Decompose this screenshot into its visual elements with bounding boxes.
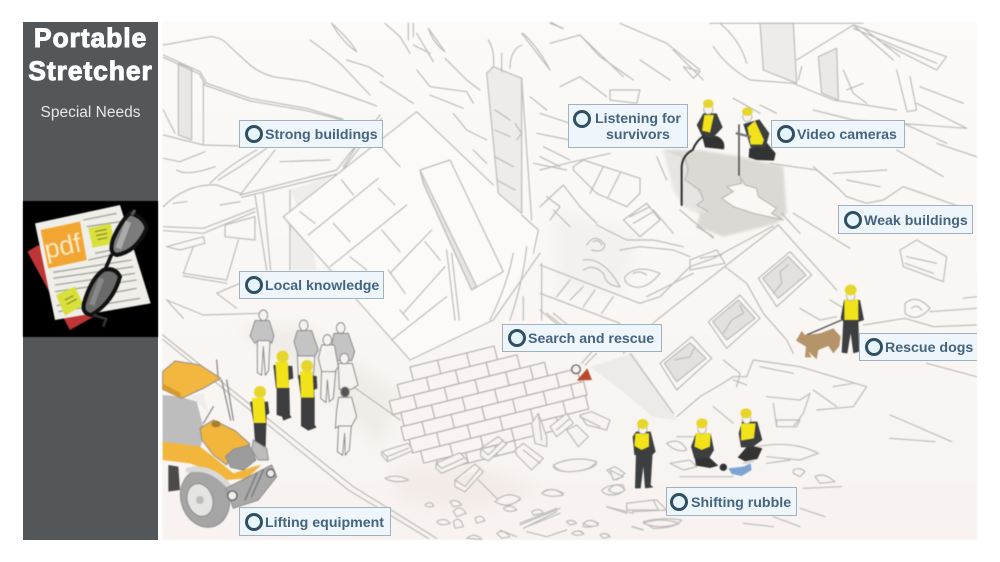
label: Lifting equipment [239,507,391,536]
soft shadows on the ground [272,332,486,494]
civilian 3 [332,323,355,361]
sidebar panel [23,22,158,540]
civilian 4 [318,335,338,403]
civilian 1 [250,310,274,375]
civilian 2 [294,320,318,378]
label: Shifting rubble: Shifting rubble [691,495,791,511]
camera worker [737,107,776,175]
label: Video cameras: Video cameras [797,127,897,143]
title: Portable [34,23,147,53]
yellow digger [163,360,277,534]
road edge lines [163,335,437,538]
label: Shifting rubble [666,487,797,516]
upper left buildings and big roof panel [163,22,570,360]
label: Strong buildings: Strong buildings [265,127,378,143]
label: Search and rescue [502,324,662,352]
title: Stretcher [28,56,153,86]
label: Rescue dogs [859,333,977,361]
subtitle: Special Needs [41,104,140,121]
label: Video cameras [771,120,905,148]
label: Lifting equipment: Lifting equipment [265,515,384,531]
label: Local knowledge: Local knowledge [265,278,379,294]
label: Listening for survivors [568,104,688,148]
civilian 5 [338,353,358,389]
kneeling worker left [691,418,718,468]
standing rubble worker [633,419,656,488]
window 1 [758,252,812,307]
civilians and rescue workers on the road [250,310,358,455]
civilian 6 [335,387,357,455]
rescue dog [796,328,841,359]
right side rubble and debris [500,297,977,537]
label: Listening for survivors: survivors [606,127,670,143]
label: Rescue dogs: Rescue dogs [885,340,973,356]
stretcher casualty [720,462,753,476]
chimney stack [487,40,532,220]
brick wall [388,345,590,466]
icon: pdf document with glasses: pdf [42,227,85,265]
central rubble pile [540,153,725,297]
label: Weak buildings [838,205,973,234]
listening worker [682,99,724,205]
illustration: collapsed building rescue scene [162,22,978,540]
loose bricks and stones [382,412,679,539]
label: Listening for survivors: Listening for [595,111,681,127]
label: Strong buildings [239,120,383,148]
dog handler [807,285,864,353]
listening and camera rescuers [682,99,776,205]
icon: pdf document with glasses [22,200,159,338]
tilted building wall with three windows [540,225,837,420]
window 3 [660,337,712,390]
right rescuers, dog and casualty [633,285,864,488]
kneeling worker right [738,408,762,461]
buried casualty [572,350,597,381]
label: Search and rescue: Search and rescue [528,331,654,347]
label: Weak buildings: Weak buildings [864,213,968,229]
title [28,23,153,86]
worker 3 [250,386,269,447]
upper right broken rooftops [522,23,977,282]
label: Local knowledge [239,271,384,299]
window 2 [708,295,760,348]
worker 1 [273,351,293,421]
worker 2 [298,360,317,431]
